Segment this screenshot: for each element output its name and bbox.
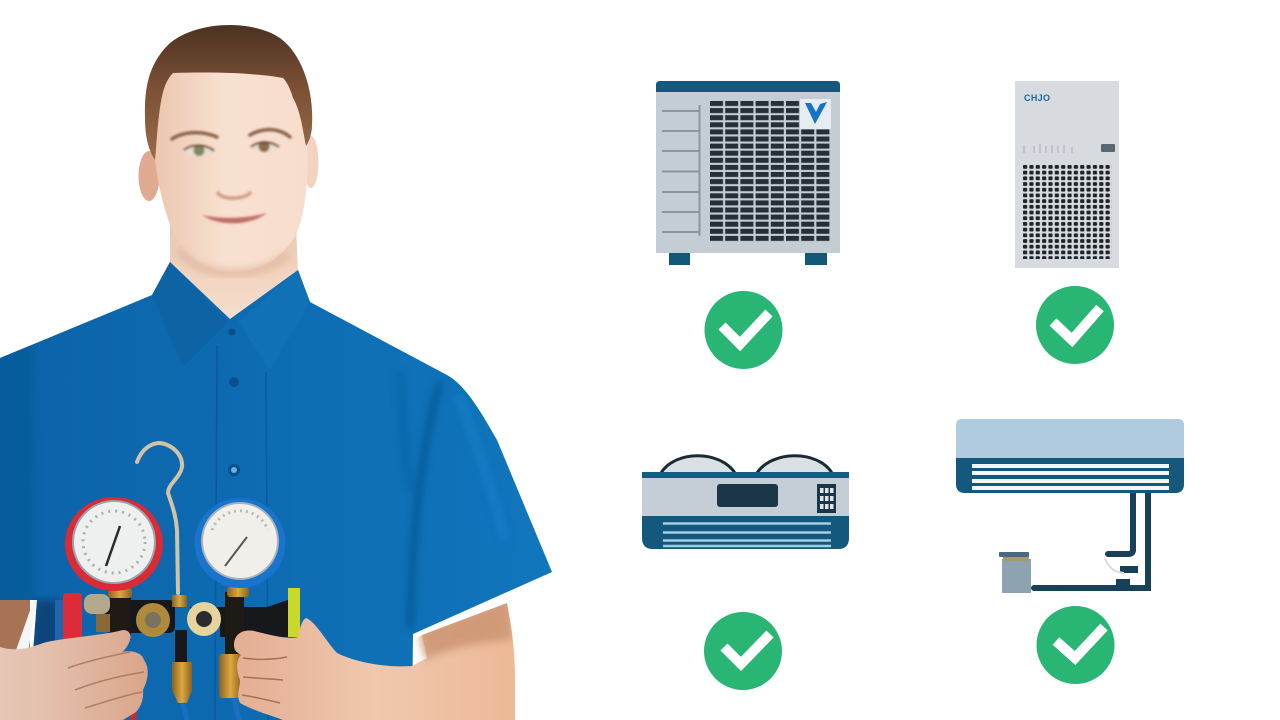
keypad xyxy=(817,484,836,513)
shading blur layer xyxy=(0,344,444,646)
status display xyxy=(1101,144,1115,152)
right sleeve seam xyxy=(410,382,440,628)
hose loops xyxy=(661,456,832,473)
blue handle edge xyxy=(55,600,64,642)
chin shadow xyxy=(178,250,288,273)
left fitting xyxy=(108,588,132,598)
split louvers xyxy=(972,466,1169,488)
right stem xyxy=(225,592,244,658)
loop fill xyxy=(663,457,830,472)
gauge hook xyxy=(137,443,182,593)
yellow handle xyxy=(288,588,300,637)
blue gauge xyxy=(194,498,286,588)
lower panel xyxy=(642,516,849,549)
blue hoses xyxy=(183,698,239,720)
shirt placket xyxy=(215,345,268,720)
white pipe loop xyxy=(1105,559,1124,573)
top bar xyxy=(656,81,840,92)
left finger lines xyxy=(68,652,144,708)
check badge: tall unit xyxy=(1036,286,1114,364)
shirt shading xyxy=(0,344,444,646)
red gauge xyxy=(65,497,163,591)
shirt body xyxy=(0,262,552,720)
right black body xyxy=(190,600,288,637)
cassette top bar xyxy=(642,472,849,478)
ear right xyxy=(304,136,318,188)
red hose xyxy=(133,712,134,720)
ear left xyxy=(138,151,160,201)
pipe run xyxy=(1034,493,1148,588)
fin slats xyxy=(662,105,700,236)
check badge: condenser xyxy=(704,291,782,369)
eye right xyxy=(251,141,279,152)
pipe fittings xyxy=(1116,566,1138,587)
tall vented unit xyxy=(1015,81,1119,268)
center stem xyxy=(175,630,187,663)
mouth xyxy=(202,213,267,223)
unit feet xyxy=(669,250,827,265)
face xyxy=(154,70,308,272)
shirt button upper xyxy=(229,377,239,387)
outdoor condenser unit xyxy=(656,81,840,265)
wall split unit with pipes xyxy=(956,419,1184,593)
technician figure xyxy=(0,25,552,720)
unit body xyxy=(656,84,840,253)
dotted vent grid xyxy=(1023,165,1112,259)
split unit top xyxy=(956,419,1184,458)
brand label: CHJO xyxy=(1024,93,1050,103)
brass valve xyxy=(136,603,170,637)
red handle xyxy=(63,593,82,647)
hair xyxy=(145,25,312,160)
cassette body xyxy=(642,478,849,518)
collar right xyxy=(238,270,310,370)
manifold body xyxy=(55,587,300,720)
center coupling xyxy=(172,662,192,703)
left sleeve shade xyxy=(0,340,34,610)
collar button xyxy=(228,328,236,336)
right fitting xyxy=(227,587,249,597)
fan grille xyxy=(710,101,831,242)
left hand xyxy=(0,630,148,720)
louvers xyxy=(663,524,831,546)
shoulder fold xyxy=(400,372,410,490)
left upper arm xyxy=(0,598,30,660)
right hand and forearm xyxy=(234,603,515,720)
right coupling xyxy=(219,654,242,698)
top fitting xyxy=(172,595,187,607)
right finger lines xyxy=(242,657,287,703)
collar left xyxy=(152,262,228,367)
valve block xyxy=(999,552,1031,593)
left black body xyxy=(105,600,175,633)
eyebrows xyxy=(172,130,290,139)
tall unit body xyxy=(1015,81,1119,268)
check badge: wall split xyxy=(1036,606,1114,684)
split unit lower panel xyxy=(956,458,1184,493)
shirt button lower xyxy=(228,464,240,476)
brass coil xyxy=(96,614,110,632)
facial features xyxy=(172,130,290,223)
left stem xyxy=(110,592,131,640)
nose xyxy=(218,193,250,198)
ceiling cassette unit xyxy=(642,456,849,549)
sleeve gap xyxy=(15,588,38,653)
eye left xyxy=(184,145,214,156)
neck xyxy=(170,225,298,322)
logo badge xyxy=(800,99,831,129)
handle knob xyxy=(84,594,110,614)
indicator ticks xyxy=(1024,144,1072,153)
cream valve xyxy=(187,602,221,636)
check badge: cassette xyxy=(704,612,782,690)
lower-left shadow behind hand xyxy=(34,596,62,646)
sleeve highlight xyxy=(458,395,505,540)
inner elbow shade xyxy=(418,598,512,660)
elbow shade blur xyxy=(418,598,512,660)
display panel xyxy=(717,484,778,507)
